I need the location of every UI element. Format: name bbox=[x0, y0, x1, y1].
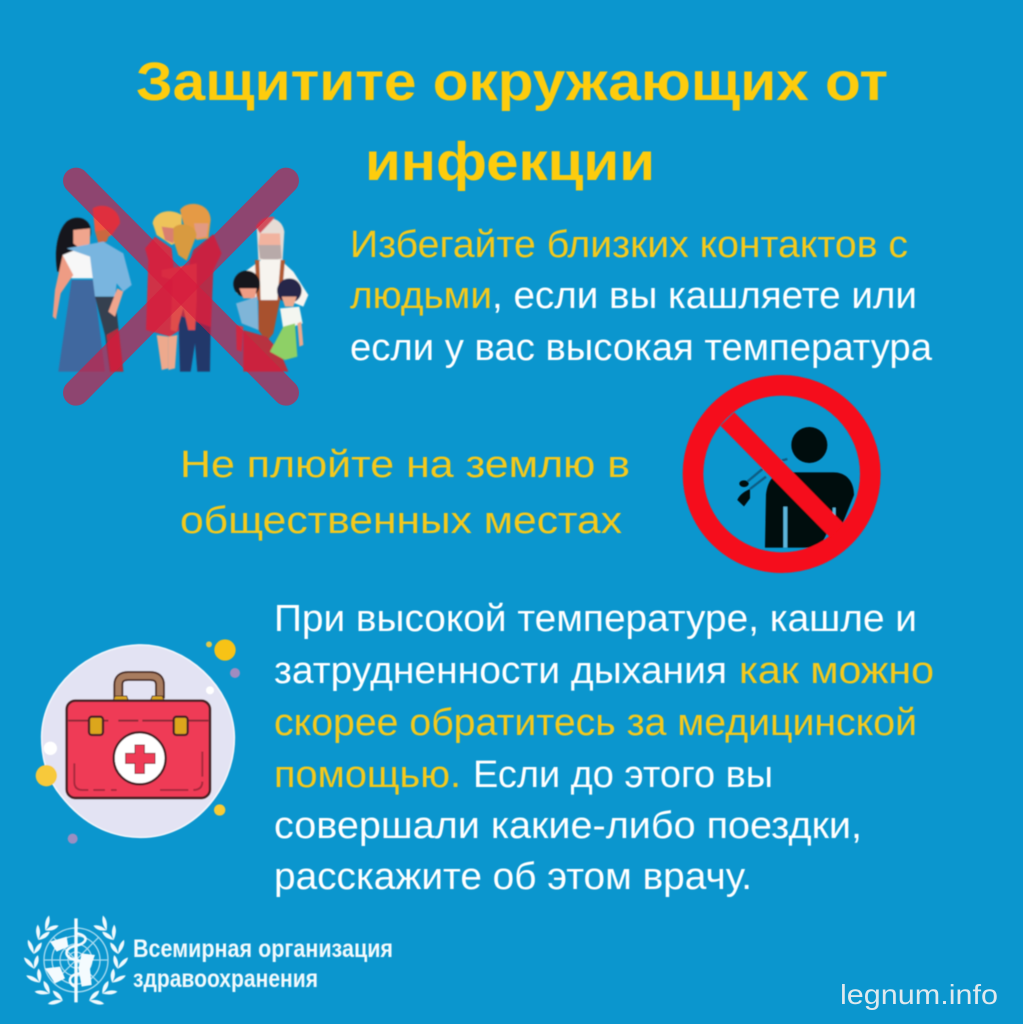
text: seek medical help: помощью. bbox=[274, 754, 461, 796]
icon: first aid kit bbox=[36, 639, 240, 844]
latches bbox=[89, 717, 103, 735]
text: do not spit: общественных местах bbox=[180, 500, 622, 542]
continents bbox=[45, 937, 95, 987]
title: инфекции bbox=[365, 132, 655, 192]
text: seek medical help: скорее обратитесь за медицинской bbox=[274, 702, 917, 744]
watermark: legnum.info bbox=[840, 979, 998, 1010]
logo text: WHO name bbox=[133, 935, 393, 993]
text: seek medical help: расскажите об этом врачу. bbox=[274, 856, 752, 898]
logo text: WHO name: Всемирная организация bbox=[133, 935, 393, 963]
logo: WHO emblem bbox=[24, 915, 128, 1008]
icon: no spitting sign bbox=[693, 385, 870, 563]
globe bbox=[44, 928, 108, 992]
logo text: WHO name: здравоохранения bbox=[133, 965, 318, 993]
prohibition ring bbox=[693, 385, 870, 563]
text: avoid close contact: Избегайте близких контактов с bbox=[350, 224, 908, 266]
text: avoid close contact: людьми bbox=[350, 275, 492, 317]
handle bbox=[118, 676, 160, 698]
title: Защитите окружающих от bbox=[136, 52, 888, 112]
figures: embracing couple with child bbox=[145, 204, 222, 372]
text: seek medical help: При высокой температуре, кашле и bbox=[274, 598, 917, 640]
figure: grandfather with children bbox=[233, 217, 308, 372]
medical cross badge bbox=[114, 732, 166, 784]
laurel right bbox=[87, 915, 128, 1008]
text: avoid close contact bbox=[350, 224, 933, 369]
laurel left bbox=[24, 915, 65, 1008]
text: seek medical help: совершали какие-либо поездки, bbox=[274, 805, 862, 847]
figure: man in blue shirt bbox=[67, 206, 132, 372]
case body bbox=[67, 701, 210, 798]
text: do not spit: Не плюйте на землю в bbox=[180, 444, 630, 486]
text: seek medical help: затрудненности дыхания bbox=[274, 650, 727, 692]
decorative dots bbox=[36, 639, 240, 844]
text: avoid close contact: если у вас высокая температура bbox=[350, 327, 933, 369]
text: avoid close contact: , если вы кашляете или bbox=[492, 275, 917, 317]
person silhouette bbox=[737, 427, 854, 548]
text: seek medical help: Если до этого вы bbox=[473, 754, 773, 796]
title bbox=[136, 52, 888, 192]
icon: family crossed out bbox=[53, 181, 308, 393]
figure: woman in blue skirt bbox=[53, 218, 105, 372]
lavender circle bbox=[42, 645, 234, 837]
icon: red cross mark bbox=[76, 181, 286, 393]
text: do not spit bbox=[180, 444, 630, 542]
staff and serpent bbox=[71, 918, 81, 1002]
text: seek medical help bbox=[274, 598, 934, 898]
text: seek medical help: как можно bbox=[739, 650, 934, 692]
